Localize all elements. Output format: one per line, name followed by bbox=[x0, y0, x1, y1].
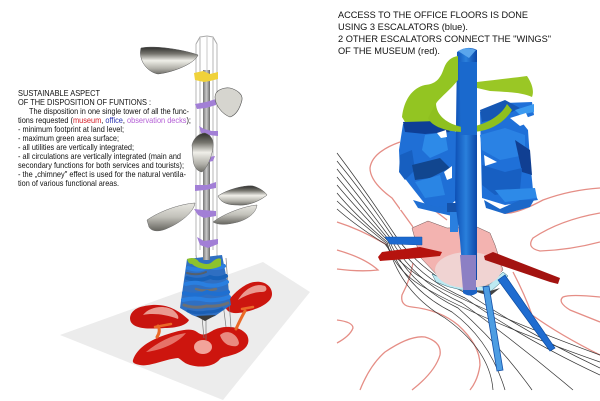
orange access arrows bbox=[155, 307, 253, 337]
escalator: blue left bbox=[385, 237, 422, 245]
shadow under plate bbox=[470, 288, 500, 296]
text block: escalators: OF THE MUSEUM (red). bbox=[338, 46, 440, 57]
plate lighter disc bbox=[435, 252, 501, 288]
text block: sustainable aspect: tions requested (museum, office, observation decks); bbox=[18, 115, 191, 125]
text block: sustainable aspect: The disposition in one single tower of all the func- bbox=[29, 106, 189, 116]
green ribbon: left mass bbox=[402, 56, 458, 122]
text block: sustainable aspect: SUSTAINABLE ASPECT bbox=[18, 88, 100, 98]
escalator: blue lower bbox=[483, 286, 503, 371]
pod: lower left bbox=[147, 203, 195, 231]
text block: sustainable aspect: tion of various functional areas. bbox=[18, 178, 119, 188]
site contours: black bbox=[337, 153, 600, 390]
museum wings: red footprint bbox=[130, 282, 272, 367]
pod: lower right upper bbox=[218, 186, 267, 205]
tower mast and cage bbox=[196, 36, 217, 260]
green ribbon: ring bbox=[428, 103, 512, 132]
pod: lower right lower bbox=[213, 205, 257, 224]
tower cables bbox=[196, 255, 231, 340]
text block: escalators: USING 3 ESCALATORS (blue). bbox=[338, 22, 468, 33]
column front over green ribbon bbox=[459, 62, 477, 135]
column seen through plate bbox=[460, 255, 476, 290]
column top cap bbox=[458, 48, 476, 58]
text block: sustainable aspect: - maximum green area surface; bbox=[18, 133, 119, 143]
office escalators: blue ribbons, right cluster bbox=[480, 100, 538, 205]
escalator: blue right bbox=[498, 275, 555, 351]
ground plane bbox=[60, 262, 310, 400]
text block: sustainable aspect: - all circulations are vertically integrated (main and bbox=[18, 151, 181, 161]
site contours: red bbox=[337, 142, 600, 390]
text block: escalators bbox=[338, 10, 551, 57]
text block: escalators: 2 OTHER ESCALATORS CONNECT THE "WINGS" bbox=[338, 34, 551, 45]
central blue column bbox=[455, 48, 477, 280]
text block: sustainable aspect: secondary functions for both services and tourists); bbox=[18, 160, 184, 170]
office connectors: purple bbox=[194, 99, 218, 248]
pod: middle bbox=[192, 133, 213, 172]
escalator: red left bbox=[378, 247, 442, 261]
observation deck connector: yellow bbox=[194, 71, 218, 82]
text block: sustainable aspect: - the „chimney" effect is used for the natural ventila- bbox=[18, 169, 186, 179]
central column base below plate bbox=[463, 280, 477, 296]
green ribbon: right band bbox=[477, 76, 533, 97]
text block: sustainable aspect: - all utilities are vertically integrated; bbox=[18, 142, 134, 152]
museum floor plate: pink bbox=[412, 221, 503, 287]
text block: sustainable aspect: OF THE DISPOSITION OF FUNTIONS : bbox=[18, 97, 151, 107]
pod: upper right bbox=[215, 88, 242, 117]
gaps between right ribbons bbox=[484, 113, 530, 166]
text block: escalators: ACCESS TO THE OFFICE FLOORS IS DONE bbox=[338, 10, 528, 21]
office escalators: blue ribbons, left cluster bbox=[399, 118, 456, 210]
escalator: red right bbox=[484, 252, 560, 284]
office block: blue stack bbox=[180, 255, 231, 321]
museum floor plate: cyan base bbox=[432, 272, 508, 292]
pod: observation deck top left bbox=[140, 47, 198, 74]
office escalators: lower ribbons bbox=[413, 200, 534, 232]
text block: sustainable aspect bbox=[18, 88, 191, 188]
gaps between left ribbons bbox=[400, 130, 452, 210]
text block: sustainable aspect: - minimum footprint at land level; bbox=[18, 124, 124, 134]
